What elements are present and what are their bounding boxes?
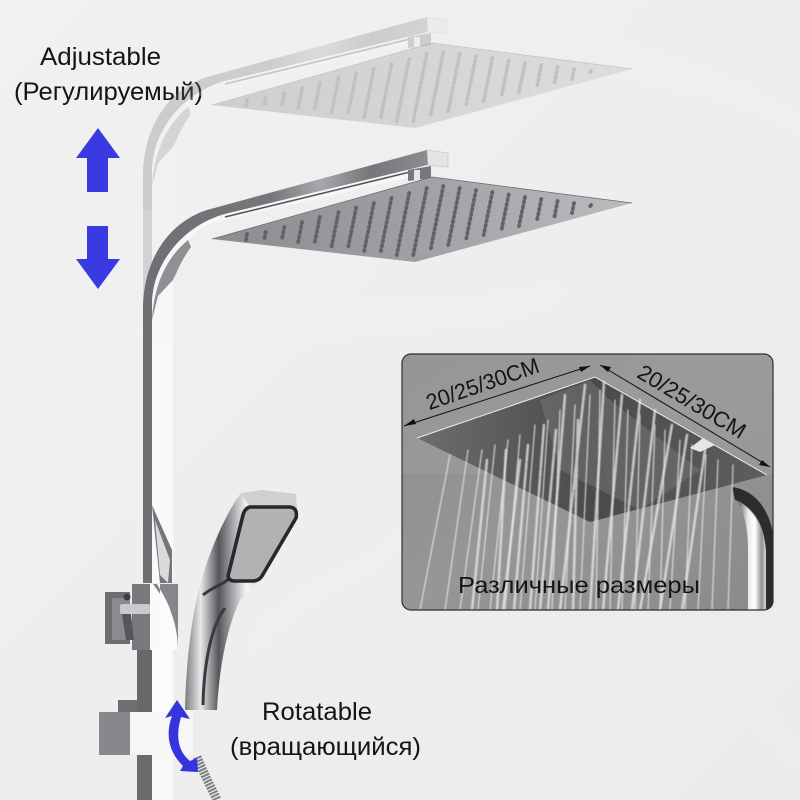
panel: various sizes (402, 354, 775, 612)
rotation arrow (165, 700, 198, 772)
ghost raised shower head (212, 43, 632, 128)
arrow: up (76, 128, 120, 192)
dimension: right edge (600, 359, 770, 467)
shower face (228, 507, 296, 581)
rotatable label (230, 698, 421, 761)
arrow: down (76, 226, 120, 289)
size caption: Различные размеры (458, 572, 700, 598)
shower pole (137, 340, 173, 800)
ghost raised shower arm (143, 17, 448, 345)
adjustable heading: (Регулируемый) (14, 78, 203, 106)
lower shower arm (143, 150, 448, 345)
inset shower arm (732, 487, 775, 612)
rotatable label: (вращающийся) (230, 733, 421, 761)
rotatable label: Rotatable (262, 698, 372, 726)
dimension: left edge (404, 353, 590, 426)
dimension: right edge: 20/25/30CM (633, 359, 751, 444)
falling water (420, 382, 733, 610)
adjustable heading (14, 43, 203, 106)
panel border (402, 354, 773, 610)
slider bracket and valve (105, 584, 178, 650)
inset square plate (417, 377, 767, 522)
adjustable heading: Adjustable (40, 43, 161, 71)
lower shower head (212, 177, 632, 262)
dimension: left edge: 20/25/30CM (423, 353, 542, 415)
hand shower (185, 490, 297, 710)
holder clamp (99, 700, 223, 757)
hose (197, 757, 217, 800)
